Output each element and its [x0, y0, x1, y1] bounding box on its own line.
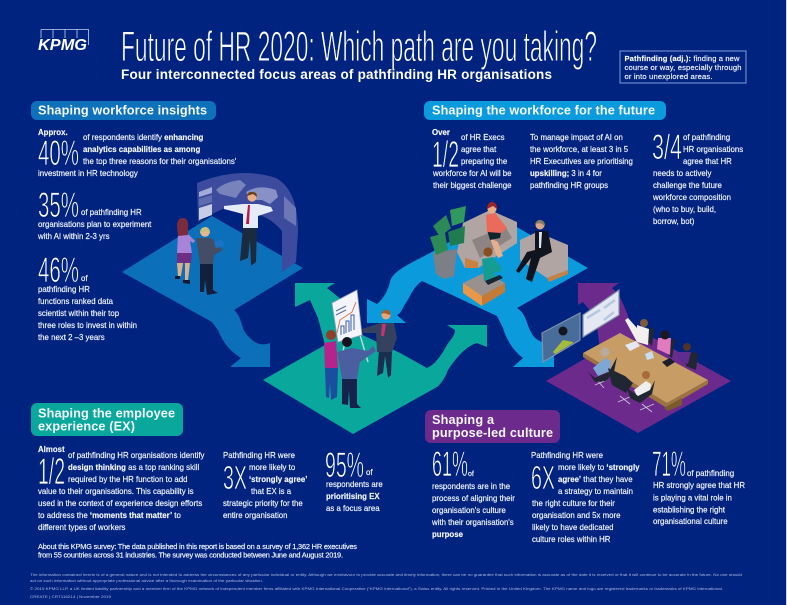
- stat: 71 percent: [652, 445, 745, 526]
- panel: shaping workforce insights: [31, 101, 237, 342]
- stat: 46 percent: three roles to invest in within: [38, 321, 137, 330]
- stat: 71 percent: HR strongly agree that HR: [653, 481, 745, 490]
- stat: 35 percent: with AI within 2-3 yrs: [37, 232, 110, 241]
- illustration: boardroom with video screens: [542, 290, 708, 412]
- text: about this survey: from 55 countries across 31 industries. The survey was conducted between June and August 2019.: [38, 550, 343, 560]
- stat: three quarters: needs to actively: [653, 169, 712, 178]
- woman in red on sofa: [486, 202, 507, 258]
- text: about this survey: About this KPMG survey: The data published in this report is based on a survey of 1,362 HR executives: [38, 542, 357, 551]
- text: about this survey: [38, 542, 357, 560]
- stat: almost one half: required by the HR function to add: [68, 475, 187, 484]
- stat: 3X: 3X: [223, 459, 247, 496]
- stat: 46 percent: of: [81, 274, 88, 283]
- platform: employee experience teal diamond with arrows: [263, 283, 487, 434]
- stat: over one half: [432, 128, 512, 190]
- heading pill: [424, 101, 666, 120]
- woman in purple: [175, 218, 195, 284]
- stat: 6X: 6X: [531, 459, 555, 496]
- stat: 71 percent: is playing a vital role in: [653, 494, 732, 502]
- text: upskilling: [530, 133, 633, 190]
- stat: three quarters: challenge the future: [653, 181, 723, 190]
- stat: 3X: ‘strongly agree’: [249, 475, 307, 484]
- stat: three quarters: (who to buy, build,: [653, 205, 716, 214]
- illustration: flip chart presentation: [324, 290, 397, 408]
- heading pill: Shaping a: [432, 413, 495, 427]
- armchair and man in suit: [516, 220, 568, 282]
- logo: KPMG: [38, 30, 88, 54]
- video call screen: [542, 313, 580, 362]
- stat: 40 percent: analytics capabilities as among: [83, 145, 200, 154]
- stat: 95 percent: 95%: [325, 446, 364, 485]
- plant: [430, 206, 466, 279]
- stat: 3X: that EX is a: [251, 487, 292, 496]
- stat: over one half: of HR Execs: [461, 133, 505, 142]
- stat: 35 percent: 35%: [38, 186, 79, 225]
- stat: 46 percent: functions ranked data: [38, 297, 114, 306]
- subtitle: Four interconnected focus areas of pathfinding HR organisations: [121, 67, 552, 82]
- stat: 6X: the right culture for their: [532, 499, 615, 508]
- heading pill: Shaping workforce insights: [38, 104, 207, 118]
- stat: 35 percent: of pathfinding HR: [81, 208, 142, 217]
- stat: 95 percent: as a focus area: [326, 504, 380, 513]
- logo: KPMG: KPMG: [38, 37, 87, 54]
- stat: 3X: more likely to: [249, 463, 296, 472]
- stat: 3X: strategic priority for the: [223, 499, 303, 508]
- stat: 95 percent: [325, 446, 383, 513]
- legal footer: act on such information without appropriate professional advice after a thorough examination of the particular situation.: [30, 578, 263, 583]
- curved world-map screen: [197, 173, 298, 272]
- stat: 6X: [531, 451, 640, 544]
- text: upskilling: pathfinding HR groups: [530, 181, 608, 190]
- stat: three quarters: HR organisations: [683, 145, 743, 154]
- heading pill: [425, 410, 560, 443]
- stat: three quarters: agree that HR: [683, 157, 732, 166]
- stat: 95 percent: prioritising EX: [326, 492, 380, 501]
- legal footer: CREATE | CRT116214 | November 2019: [30, 594, 111, 599]
- stat: 3X: entire organisation: [223, 511, 288, 520]
- platform: culture purple diamond with arrow: [546, 283, 731, 433]
- definition box: pathfinding: Pathfinding (adj.): finding a new: [624, 54, 740, 63]
- stat: 40 percent: investment in HR technology: [38, 169, 138, 178]
- flip chart: [332, 290, 368, 365]
- stat: 40 percent: [38, 128, 237, 178]
- platform: future light-blue diamond with arrows: [367, 215, 588, 367]
- man with tablet: [196, 227, 224, 295]
- stat: almost one half: of pathfinding HR organisations identify: [68, 451, 205, 460]
- stat: almost one half: to address the ‘moments that matter’ to: [38, 511, 181, 520]
- platform: insights blue diamond with arrow: [122, 216, 303, 367]
- stat: 46 percent: the next 2 –3 years: [38, 333, 105, 342]
- stat: 61 percent: with their organisation's: [431, 518, 514, 527]
- people and chairs in front of the table: [588, 348, 655, 412]
- definition box: pathfinding: [620, 51, 746, 83]
- heading pill: [31, 101, 216, 120]
- stat: almost one half: Almost: [38, 445, 65, 454]
- text: upskilling: To manage impact of AI on: [530, 133, 623, 142]
- stat: almost one half: used in the context of experience design efforts: [38, 499, 202, 508]
- data screen: [583, 290, 619, 337]
- stat: three quarters: 3/4: [652, 128, 682, 167]
- stat: 40 percent: of respondents identify enhancing: [83, 133, 204, 142]
- stat: 46 percent: 46%: [38, 251, 79, 290]
- stat: 40 percent: the top three reasons for their organisations': [83, 157, 237, 166]
- stat: 3X: Pathfinding HR were: [223, 451, 296, 460]
- stat: over one half: agree that: [461, 145, 497, 154]
- stat: 61 percent: purpose: [432, 530, 464, 539]
- stat: 6X: culture roles within HR: [532, 535, 611, 544]
- stat: over one half: preparing the: [461, 157, 508, 166]
- stat: 6X: Pathfinding HR were: [531, 451, 604, 460]
- definition box: pathfinding: course or way, especially through: [624, 63, 742, 72]
- heading pill: experience (EX): [38, 420, 135, 434]
- stat: three quarters: borrow, bot): [653, 217, 695, 226]
- text: upskilling: the workforce, at least 3 in 5: [530, 145, 629, 154]
- stat: 46 percent: scientist within their top: [38, 309, 120, 318]
- stat: 61 percent: respondents are in the: [432, 482, 511, 491]
- stat: 95 percent: respondents are: [326, 480, 383, 489]
- illustration: isometric pathway with four platforms: [122, 173, 731, 434]
- stat: almost one half: 1/2: [38, 451, 65, 492]
- stat: 40 percent: 40%: [38, 134, 79, 173]
- man in blue: [337, 337, 376, 408]
- text: upskilling: HR Executives are prioritising: [530, 157, 633, 166]
- stat: almost one half: [38, 445, 205, 532]
- legal footer: The information contained herein is of a general nature and is not intended to address the circumstances of any particular individual or entity. Although we endeavour to provide accurate and timely information, there can be no guarantee that such information is accurate as of the date it is received or that it will continue to be accurate in the future. No one should: [30, 572, 742, 577]
- boardroom table: [583, 333, 708, 411]
- stat: over one half: 1/2: [432, 134, 459, 175]
- seated person and ottoman: [463, 247, 505, 306]
- stat: 61 percent: 61%: [432, 445, 468, 484]
- stat: 6X: organisation and 5x more: [532, 511, 621, 520]
- stat: 71 percent: 71%: [652, 445, 686, 484]
- stat: almost one half: different types of workers: [38, 523, 126, 532]
- stat: 61 percent: organisation's culture: [432, 506, 507, 515]
- panel: shaping the workforce for the future: [424, 101, 743, 226]
- stat: 95 percent: of: [366, 468, 373, 477]
- stat: three quarters: [652, 128, 743, 226]
- stat: over one half: workforce for AI will be: [432, 169, 512, 178]
- stat: three quarters: workforce composition: [652, 193, 731, 202]
- heading pill: [31, 403, 183, 436]
- stat: 6X: more likely to ‘strongly: [558, 463, 640, 472]
- stat: 35 percent: organisations plan to experiment: [38, 220, 152, 229]
- heading pill: Shaping the workforce for the future: [432, 104, 655, 118]
- stat: 71 percent: of pathfinding: [687, 469, 734, 478]
- presenter: [362, 310, 397, 378]
- legal footer: © 2019 KPMG LLP, a UK limited liability partnership and a member firm of the KPMG network of independent member firms affiliated with KPMG International Cooperative (“KPMG International”), a Swiss entity. All rights reserved. Printed in the United Kingdom. The KPMG name and logo are registered trademarks or trademarks of KPMG International.: [30, 586, 723, 591]
- stat: 6X: agree’ that they have: [558, 475, 633, 484]
- stat: three quarters: of pathfinding: [683, 133, 730, 142]
- panel: shaping a purpose-led culture: [425, 410, 745, 544]
- heading pill: Shaping the employee: [38, 406, 175, 420]
- illustration: lounge conversation: [430, 202, 568, 306]
- stat: 71 percent: establishing the right: [653, 506, 726, 514]
- text: upskilling: upskilling; 3 in 4 for: [530, 169, 602, 178]
- stat: 3X: [223, 451, 307, 520]
- stat: over one half: Over: [432, 128, 450, 137]
- woman in magenta: [324, 330, 338, 400]
- stat: almost one half: value to their organisations. This capability is: [38, 487, 194, 496]
- stat: 6X: a strategy to maintain: [558, 487, 633, 496]
- illustration: analyst with curved data screen: [175, 173, 298, 295]
- sofa: [457, 210, 517, 268]
- man presenting: [224, 192, 273, 266]
- stat: over one half: their biggest challenge: [433, 181, 512, 190]
- heading pill: purpose-led culture: [432, 426, 553, 440]
- definition box: pathfinding: or into unexplored areas.: [624, 72, 712, 81]
- stat: 61 percent: of: [468, 471, 474, 478]
- panel: shaping the employee experience: [31, 403, 383, 532]
- stat: 71 percent: organisational culture: [653, 517, 728, 526]
- stat: 46 percent: pathfinding HR: [38, 285, 90, 294]
- stat: 46 percent: [38, 251, 137, 342]
- legal footer: [30, 572, 742, 599]
- stat: 35 percent: [37, 186, 152, 241]
- people and chairs behind the table: [625, 318, 698, 370]
- stat: 61 percent: [431, 445, 515, 539]
- stat: 6X: likely to have dedicated: [532, 523, 614, 532]
- stat: 61 percent: process of aligning their: [432, 494, 515, 503]
- stat: almost one half: design thinking as a top ranking skill: [68, 463, 199, 472]
- stat: 40 percent: Approx.: [38, 128, 68, 137]
